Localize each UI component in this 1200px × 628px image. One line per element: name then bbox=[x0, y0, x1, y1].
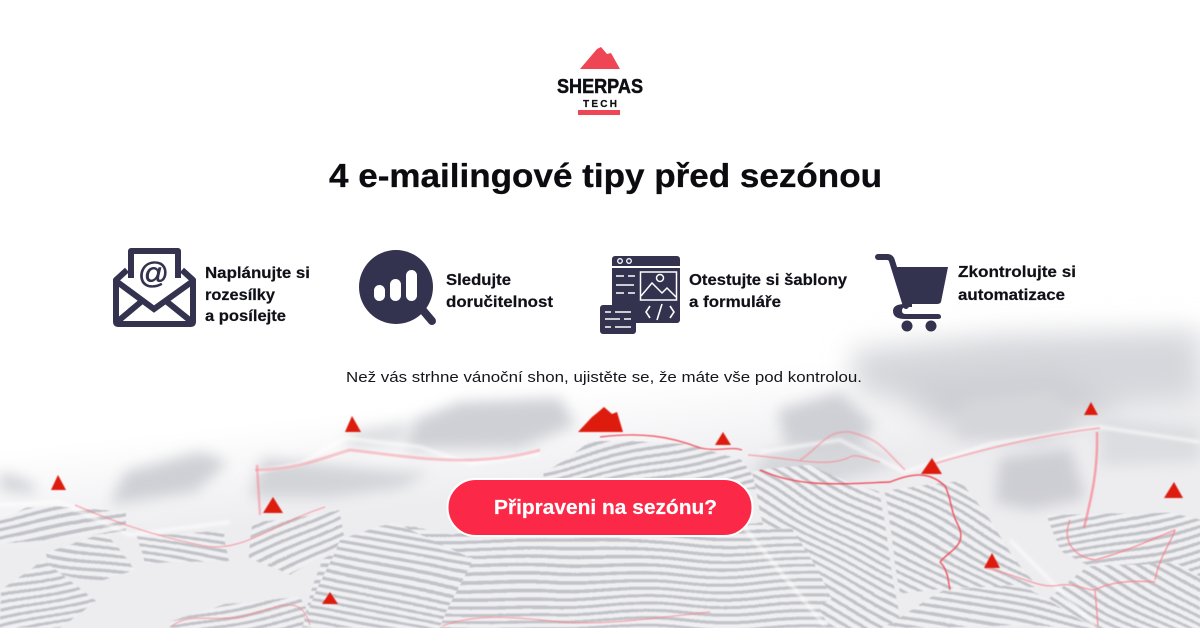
route lines bbox=[75, 428, 1175, 626]
red triangle markers bbox=[51, 402, 1183, 604]
tip 1: schedule campaigns bbox=[116, 251, 310, 325]
icon: shopping cart bbox=[878, 257, 948, 332]
tip 1: schedule campaigns: a posílejte bbox=[205, 308, 286, 325]
tip 2: monitor deliverability bbox=[359, 250, 553, 324]
tip 2: monitor deliverability: doručitelnost bbox=[446, 294, 553, 311]
call to action button bbox=[448, 479, 752, 536]
tip 3: test templates and forms: a formuláře bbox=[689, 294, 781, 311]
tip 1: schedule campaigns: rozesílky bbox=[205, 287, 275, 304]
terrain background bbox=[0, 320, 1200, 628]
call to action button: Připraveni na sezónu? bbox=[494, 497, 717, 519]
icon: envelope bbox=[116, 251, 193, 324]
icon: magnifier with bars bbox=[359, 250, 433, 324]
icon: browser window with code bbox=[600, 256, 680, 334]
terrain foreground ridges bbox=[0, 442, 1200, 628]
icon: envelope: @ bbox=[138, 257, 169, 290]
tip 3: test templates and forms bbox=[600, 256, 847, 334]
tip 1: schedule campaigns: Naplánujte si bbox=[205, 265, 310, 282]
logo: Sherpas Tech bbox=[557, 47, 643, 115]
terrain blurred steps in white bbox=[0, 427, 1200, 626]
tip 2: monitor deliverability: Sledujte bbox=[446, 272, 511, 289]
subtitle text: Než vás strhne vánoční shon, ujistěte se, že máte vše pod kontrolou. bbox=[346, 370, 862, 386]
tip 4: check automations: Zkontrolujte si bbox=[958, 264, 1076, 281]
title: 4 e-mailingové tipy před sezónou bbox=[329, 157, 882, 194]
tip 3: test templates and forms: Otestujte si šablony bbox=[689, 272, 847, 289]
tip 4: check automations bbox=[878, 257, 1076, 332]
logo: Sherpas Tech: SHERPAS bbox=[557, 76, 643, 98]
tip 4: check automations: automatizace bbox=[958, 287, 1065, 304]
logo: Sherpas Tech: TECH bbox=[583, 99, 617, 110]
